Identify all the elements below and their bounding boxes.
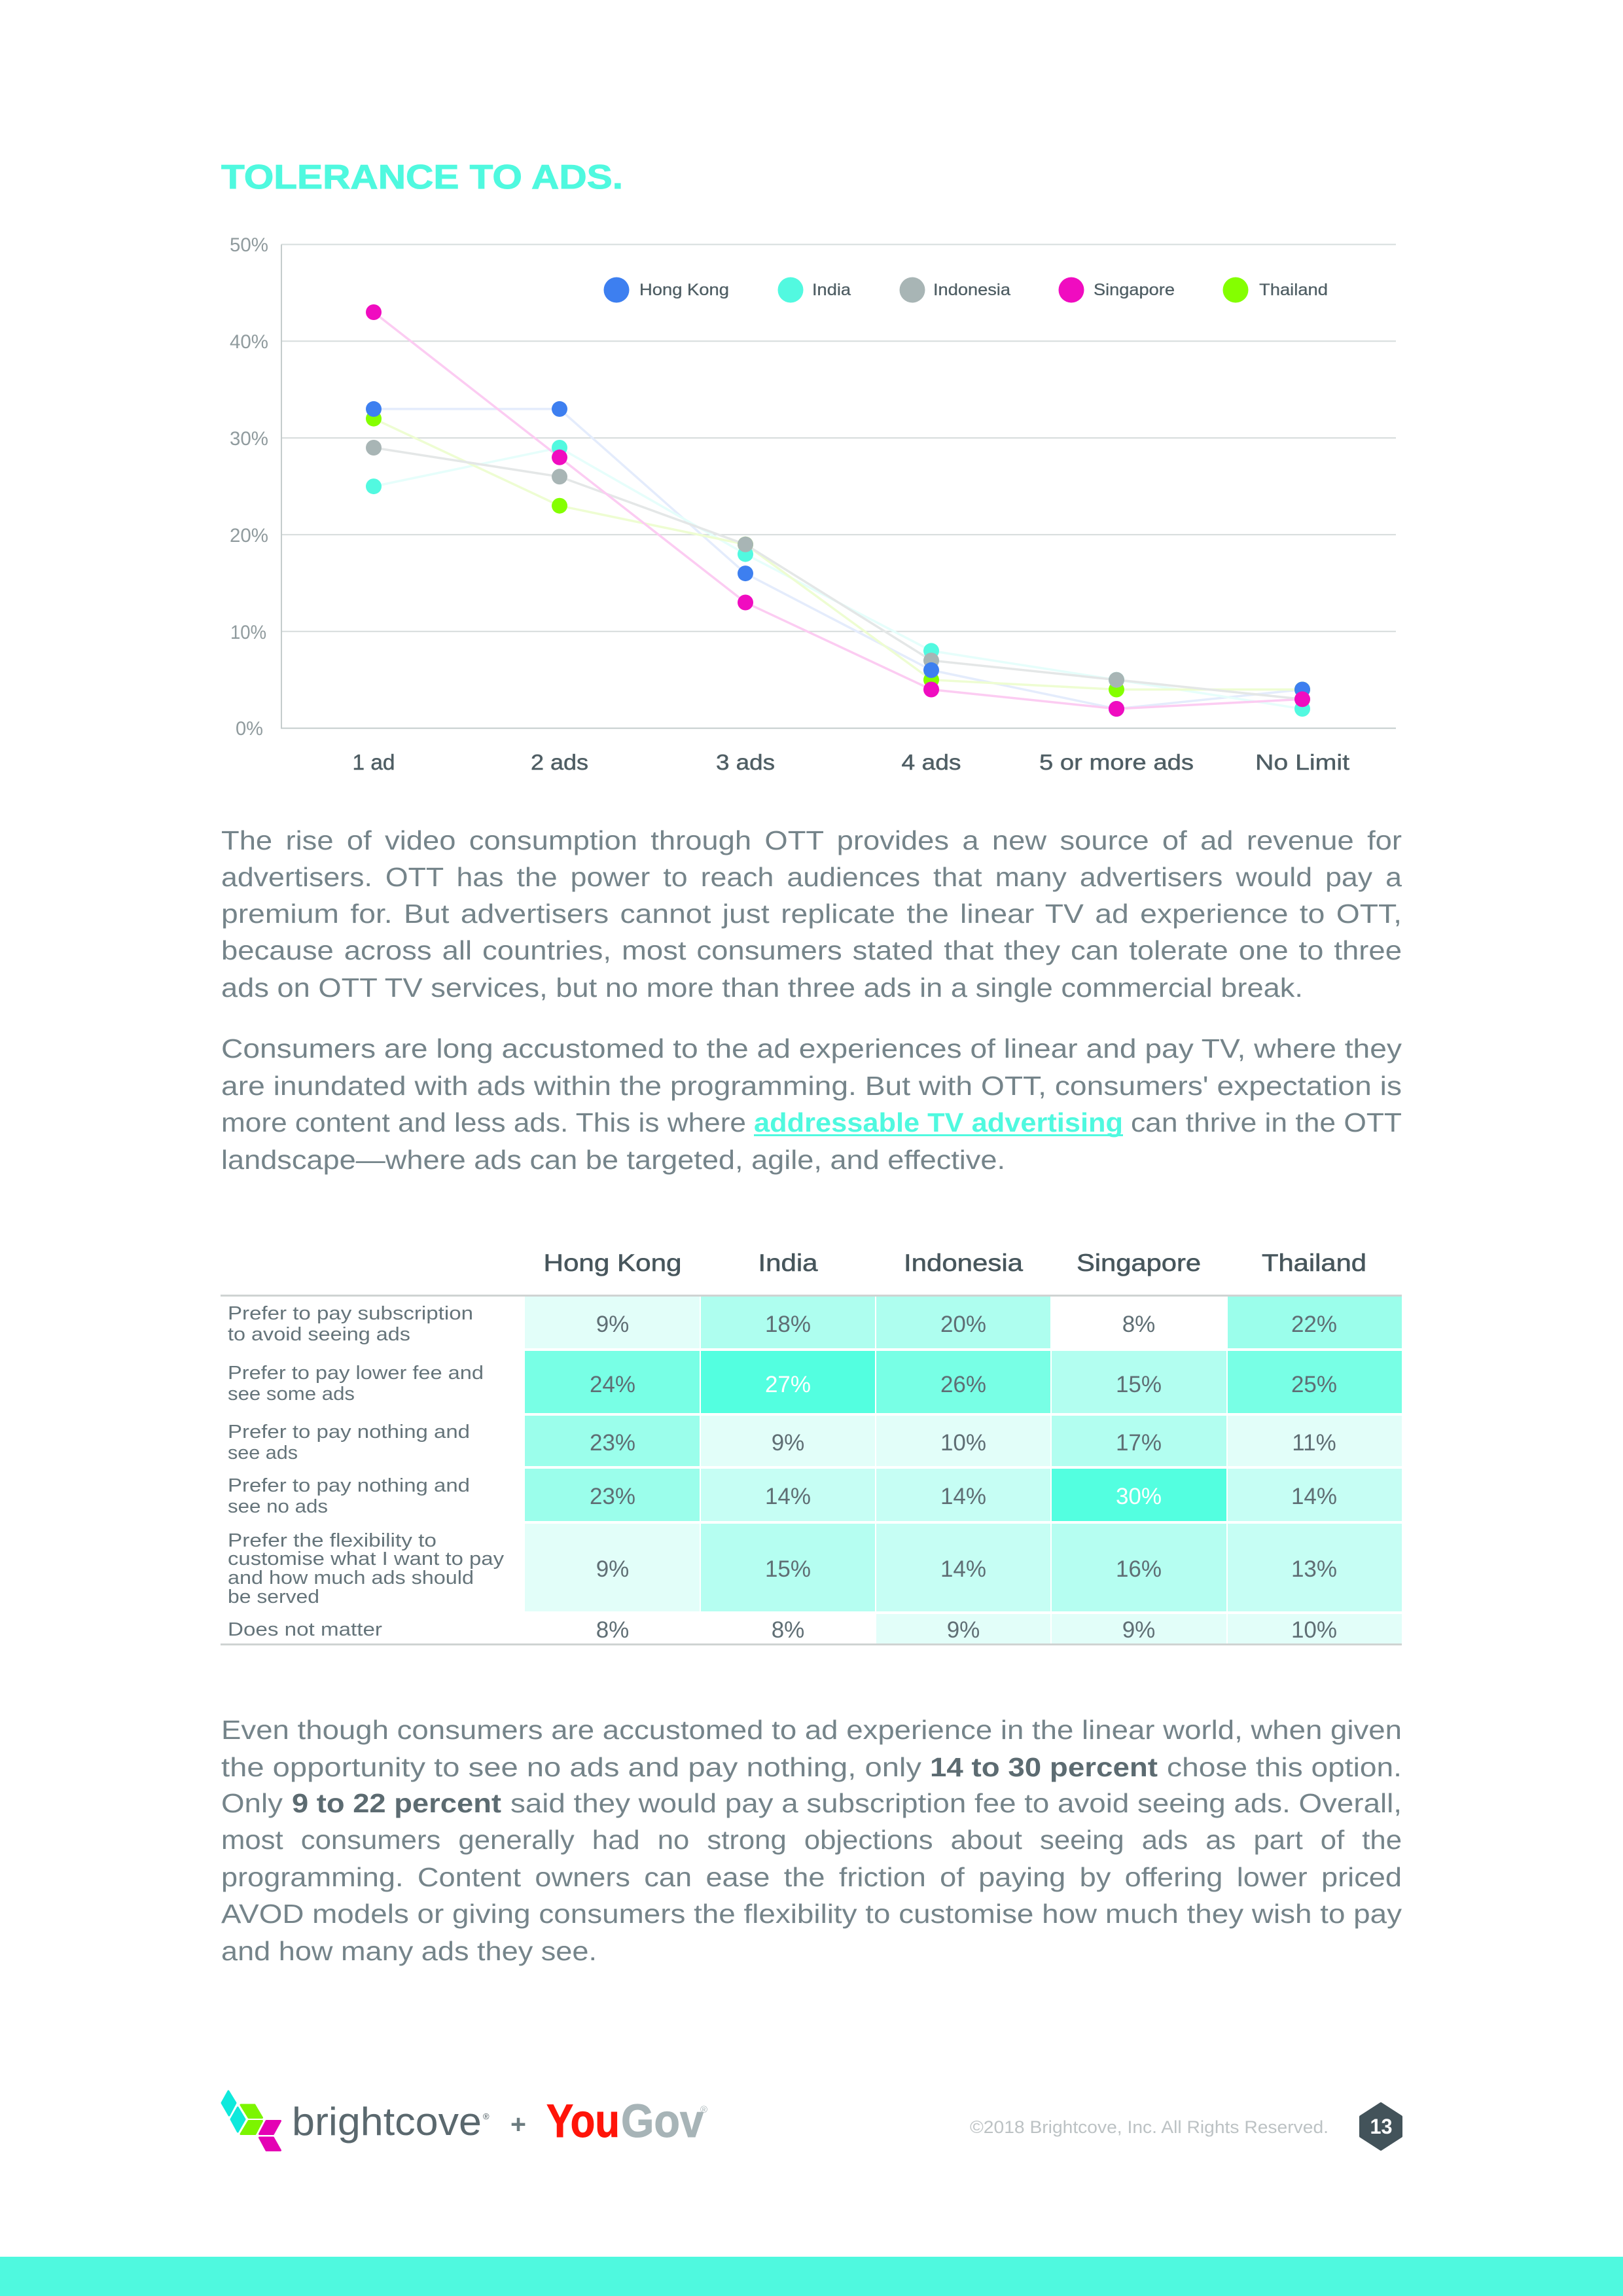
bold: 14 to 30 percent: 14 to 30 percent [930,1752,1158,1782]
text block: paragraph two: are inundated with ads within the programming. But with OTT, consumers' expectation is [221,1071,1402,1101]
table header [543,1249,1366,1276]
y axis labels: 30% [230,428,268,450]
table header: Hong Kong [543,1249,682,1276]
series: Indonesia points [366,440,1310,707]
text block: paragraph one: ads on OTT TV services, but no more than three ads in a single commercial break. [221,973,1303,1003]
text block: paragraph three: Only [221,1788,283,1818]
legend: Indonesia [933,281,1010,299]
y axis labels: 10% [230,622,266,643]
row: prefer to pay nothing and see ads: 17% [1116,1430,1162,1456]
plus sign: + [510,2110,526,2139]
row: does not matter: 8% [772,1617,804,1643]
row: prefer to pay nothing and see ads: 10% [940,1430,986,1456]
row: prefer to pay nothing and see ads: 9% [772,1430,804,1456]
row: does not matter: 8% [596,1617,629,1643]
line chart: tolerance to ads [230,234,1396,774]
logo: brightcove [222,2091,490,2151]
legend: Thailand [1259,281,1328,299]
row: prefer the flexibility: 13% [1291,1556,1337,1582]
row: prefer to pay nothing and see ads [228,1416,1402,1466]
row: prefer the flexibility: and how much ads should [228,1568,474,1588]
row: prefer to pay nothing and see no ads: Prefer to pay nothing and [228,1475,470,1496]
table header: Indonesia [904,1249,1023,1276]
text block: paragraph three: the opportunity to see no ads and pay nothing, only [221,1752,922,1782]
row: prefer the flexibility: be served [228,1587,319,1607]
row: prefer to pay subscription: 20% [940,1312,986,1337]
row: prefer to pay nothing and see no ads: 14% [1291,1484,1337,1509]
row: prefer to pay subscription [228,1297,1402,1348]
logo: brightcove: ® [483,2111,490,2121]
row: prefer the flexibility: 14% [940,1556,986,1582]
bold: 9 to 22 percent: 9 to 22 percent [292,1788,501,1818]
table header: India [758,1249,818,1276]
logo: YouGov: You [546,2096,620,2147]
bottom bar [0,2257,1623,2296]
row: prefer to pay lower fee: 15% [1116,1372,1162,1397]
row: prefer to pay subscription: 8% [1122,1312,1155,1337]
y axis labels: 50% [230,234,268,256]
logo: brightcove: brightcove [292,2100,482,2144]
text block: paragraph two: Consumers are long accustomed to the ad experiences of linear and pay TV, where they [221,1033,1402,1064]
text block: paragraph three [221,1715,1402,1966]
row: prefer to pay lower fee [228,1351,1402,1413]
series: Thailand points [366,411,1310,698]
x axis labels: No Limit [1255,750,1349,774]
row: prefer to pay lower fee: Prefer to pay lower fee and [228,1363,484,1384]
text block: paragraph three: programming. Content owners can ease the friction of paying by offering lower priced [221,1862,1402,1892]
text block: paragraph one: premium for. But advertisers cannot just replicate the linear TV ad experience to OTT, [221,899,1402,929]
table header: Thailand [1262,1249,1366,1276]
text block: paragraph three: AVOD models or giving consumers the flexibility to customise how much they wish to pay [221,1899,1402,1929]
row: prefer to pay nothing and see no ads: 14% [765,1484,811,1509]
x axis labels: 3 ads [716,750,775,774]
series: India points [366,440,1310,717]
text block: paragraph three: said they would pay a subscription fee to avoid seeing ads. Overall, [510,1788,1402,1818]
row: prefer to pay nothing and see no ads: 30% [1116,1484,1162,1509]
row: prefer to pay nothing and see ads: 23% [590,1430,635,1456]
legend: Singapore [1094,281,1175,299]
row: prefer to pay subscription: to avoid seeing ads [228,1324,410,1345]
legend: Hong Kong [639,281,729,299]
x axis labels [352,750,1349,774]
text block: paragraph two: landscape—where ads can be targeted, agile, and effective. [221,1145,1005,1175]
table header: Singapore [1077,1249,1201,1276]
row: does not matter: Does not matter [228,1619,382,1640]
text block: paragraph one: because across all countries, most consumers stated that they can tolerate one to three [221,935,1402,965]
y axis labels: 20% [230,525,268,547]
row: prefer to pay nothing and see no ads: 23% [590,1484,635,1509]
text block: paragraph three: most consumers generally had no strong objections about seeing ads as part of the [221,1825,1402,1855]
row: prefer to pay lower fee: 24% [590,1372,635,1397]
row: does not matter: 9% [1122,1617,1155,1643]
page number badge: 13 [1370,2115,1393,2138]
row: prefer to pay nothing and see no ads: 14% [940,1484,986,1509]
row: prefer to pay nothing and see no ads [228,1469,1402,1521]
row: prefer to pay subscription: 18% [765,1312,811,1337]
logo: YouGov: Gov [621,2096,704,2147]
legend [603,278,1328,302]
row: prefer to pay lower fee: 26% [940,1372,986,1397]
row: prefer to pay subscription: 9% [596,1312,629,1337]
text block: paragraph two [221,1033,1402,1175]
row: prefer to pay subscription: Prefer to pay subscription [228,1303,473,1324]
copyright: ©2018 Brightcove, Inc. All Rights Reserved. [970,2117,1329,2137]
text block: paragraph one [221,825,1402,1003]
x axis labels: 5 or more ads [1039,750,1194,774]
y axis labels: 40% [230,331,268,353]
row: prefer the flexibility: 15% [765,1556,811,1582]
series: Hong Kong points [366,401,1310,717]
row: prefer to pay nothing and see ads: Prefer to pay nothing and [228,1422,470,1443]
y axis labels [230,234,268,740]
logo: YouGov [546,2096,707,2147]
table: payment preference by country [221,1249,1402,1645]
text block: paragraph three: and how many ads they see. [221,1936,597,1966]
text block: paragraph one: The rise of video consumption through OTT provides a new source of ad revenue for [221,825,1402,855]
link: addressable TV advertising: addressable TV advertising [754,1107,1123,1138]
text block: paragraph two: can thrive in the OTT [1131,1107,1402,1138]
row: prefer to pay nothing and see no ads: see no ads [228,1496,328,1517]
row: prefer to pay nothing and see ads: see ads [228,1443,298,1463]
chart grid [281,245,1396,728]
x axis labels: 4 ads [902,750,961,774]
icon: brightcove mark [222,2091,280,2151]
x axis labels: 1 ad [352,750,395,774]
series lines [374,312,1302,709]
row: does not matter [228,1614,1402,1643]
row: prefer the flexibility: Prefer the flexibility to [228,1530,437,1551]
row: prefer to pay subscription: 22% [1291,1312,1337,1337]
row: prefer the flexibility: customise what I want to pay [228,1549,505,1570]
text block: paragraph three: Even though consumers are accustomed to ad experience in the linear world, when given [221,1715,1402,1745]
row: prefer to pay lower fee: 25% [1291,1372,1337,1397]
text block: paragraph three: chose this option. [1167,1752,1402,1782]
legend: India [812,281,851,299]
row: prefer to pay lower fee: see some ads [228,1384,355,1405]
row: prefer the flexibility [228,1524,1402,1611]
row: prefer the flexibility: 9% [596,1556,629,1582]
row: does not matter: 10% [1291,1617,1337,1643]
logo: YouGov: ® [700,2104,707,2115]
y axis labels: 0% [236,718,263,740]
row: prefer the flexibility: 16% [1116,1556,1162,1582]
text block: paragraph two: more content and less ads. This is where [221,1107,746,1138]
row: prefer to pay lower fee: 27% [765,1372,811,1397]
series: Singapore points [366,304,1310,717]
title: TOLERANCE TO ADS. [221,158,623,196]
row: prefer to pay nothing and see ads: 11% [1292,1430,1336,1456]
page number badge [1361,2104,1401,2149]
x axis labels: 2 ads [531,750,588,774]
text block: paragraph one: advertisers. OTT has the power to reach audiences that many advertisers would pay a [221,862,1402,892]
row: does not matter: 9% [947,1617,980,1643]
